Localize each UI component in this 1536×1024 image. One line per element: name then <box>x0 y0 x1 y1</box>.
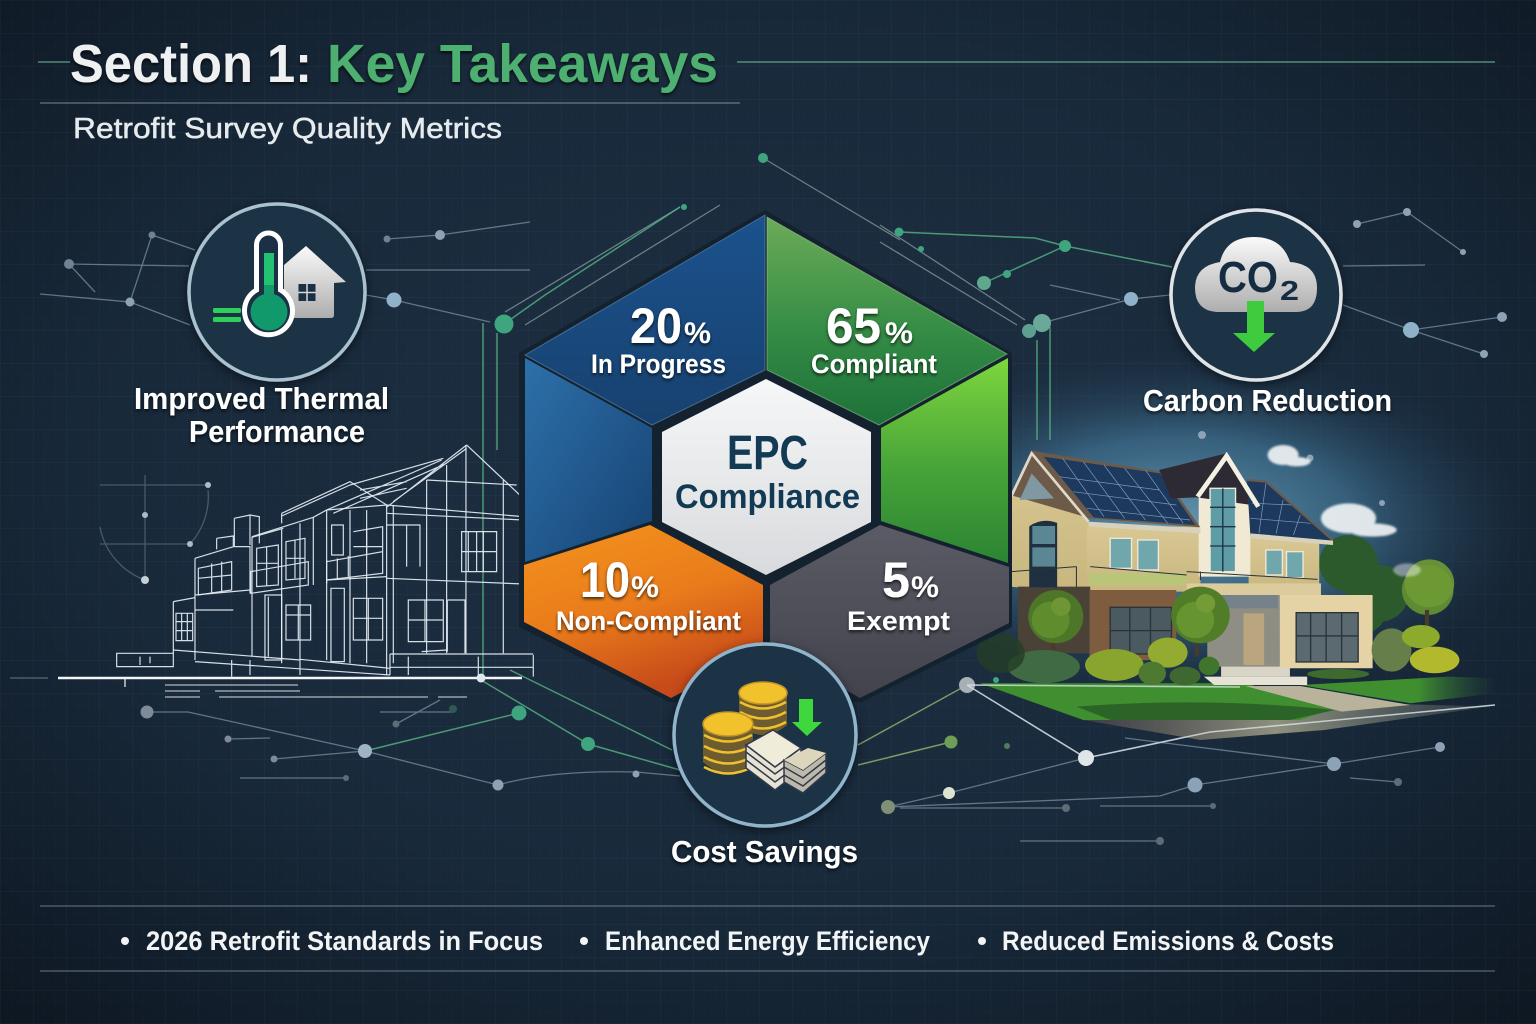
bottom bullet list <box>121 926 1334 956</box>
metric: 20% in progress: In Progress <box>591 349 726 379</box>
segment: in progress, top <box>525 215 765 425</box>
blueprint wireframe building <box>117 445 533 677</box>
title rules <box>38 62 1495 103</box>
ground and road <box>980 666 1497 740</box>
bottom bullet list: 2026 Retrofit Standards in Focus <box>146 926 543 956</box>
metric: 10% non-compliant <box>556 552 741 636</box>
metric: 65% compliant: 65 <box>826 298 881 354</box>
title: Key Takeaways <box>327 34 718 94</box>
metric: 65% compliant: % <box>885 317 913 350</box>
roof with solar panels <box>1010 451 1333 545</box>
balcony railing <box>1011 567 1318 587</box>
label: improved thermal performance: Performance <box>189 414 365 449</box>
metric: 10% non-compliant: Non-Compliant <box>556 606 741 636</box>
icon: CO2 cloud: 2 <box>1280 275 1299 306</box>
foreground network lines over house <box>967 685 1495 758</box>
subtitle: Retrofit Survey Quality Metrics <box>73 113 502 145</box>
bottom bullet list: Enhanced Energy Efficiency <box>605 926 930 956</box>
hexagon chart: EPC compliance <box>519 210 1012 702</box>
metric: 10% non-compliant: % <box>631 571 659 604</box>
network lines and nodes <box>40 153 1507 845</box>
metric: 65% compliant: Compliant <box>811 349 937 379</box>
center label: EPC <box>727 427 808 480</box>
small cash stack <box>784 748 826 793</box>
clouds <box>1268 445 1421 577</box>
segment: exempt <box>770 525 1009 698</box>
metric: 20% in progress: 20 <box>630 298 682 354</box>
icon: CO2 cloud <box>1171 210 1341 380</box>
label: improved thermal performance <box>134 381 389 449</box>
label: cost savings: Cost Savings <box>671 834 858 869</box>
trees and shrubs <box>977 559 1459 685</box>
center label: Compliance <box>675 478 860 516</box>
windows <box>1030 488 1358 662</box>
metric: 5% exempt: 5 <box>882 552 910 608</box>
solar house photo illustration <box>977 445 1497 740</box>
bottom rules <box>40 906 1495 971</box>
center hexagon <box>662 379 871 575</box>
walls <box>1010 457 1373 668</box>
metric: 20% in progress <box>591 298 726 379</box>
title <box>70 34 718 94</box>
label: improved thermal performance: Improved Thermal <box>134 381 389 416</box>
large cash stack <box>746 730 801 790</box>
icon: thermometer and house <box>189 204 365 380</box>
metric: 5% exempt: Exempt <box>847 606 950 636</box>
center label <box>675 427 860 516</box>
metric: 5% exempt: % <box>911 571 939 604</box>
metric: 10% non-compliant: 10 <box>580 552 630 608</box>
segment: compliant, side <box>881 358 1008 563</box>
hexagon backing <box>519 210 1012 702</box>
metric: 65% compliant <box>811 298 937 379</box>
bottom bullet list: Reduced Emissions & Costs <box>1002 926 1334 956</box>
blueprint ground line <box>10 674 522 697</box>
rear trees <box>1319 535 1454 633</box>
savings arrow <box>792 699 822 736</box>
title: Section 1: <box>70 34 312 94</box>
metric: 5% exempt <box>847 552 950 636</box>
label: carbon reduction: Carbon Reduction <box>1143 383 1392 418</box>
metric: 20% in progress: % <box>684 317 711 350</box>
rear coin stack <box>739 682 787 735</box>
front coin stack <box>703 712 753 774</box>
icon: CO2 cloud: CO <box>1218 253 1278 302</box>
segment: non-compliant <box>524 525 763 698</box>
segment: compliant, top <box>767 217 1007 425</box>
icon: coins and cash <box>674 644 856 826</box>
segment: in progress, side <box>525 358 652 562</box>
